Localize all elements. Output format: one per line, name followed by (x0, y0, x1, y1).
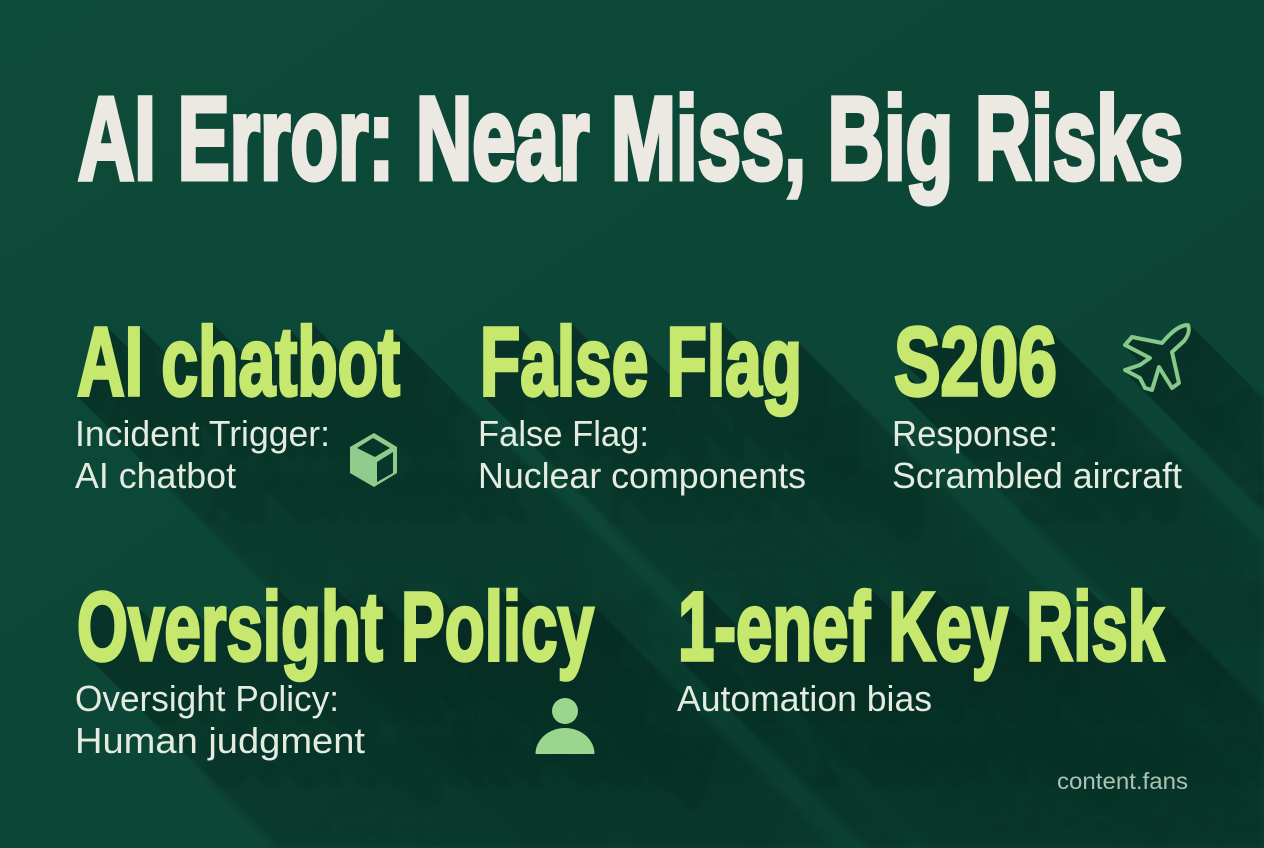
text: oversight policy description: Human judgment (75, 720, 365, 761)
text: incident trigger description: AI chatbot (75, 455, 236, 496)
heading: False Flag: False Flag (480, 307, 802, 416)
icon: person (536, 698, 594, 754)
text: key risk description: Automation bias (677, 678, 932, 719)
heading: S206: S206 (894, 307, 1057, 416)
text: response description: Scrambled aircraft (892, 455, 1182, 496)
panel: incident trigger (75, 307, 400, 496)
icon: cube (350, 433, 397, 487)
heading: Oversight Policy: Oversight Policy (77, 572, 594, 681)
text: oversight policy description: Oversight Policy: (75, 678, 339, 719)
text: incident trigger description: Incident Trigger: (75, 413, 330, 454)
panel: response (892, 307, 1189, 496)
panel: key risk (677, 572, 1165, 719)
text: false flag description: Nuclear components (478, 455, 806, 496)
panel: false flag (478, 307, 806, 496)
heading: AI chatbot: AI chatbot (77, 307, 400, 416)
panel: oversight policy (75, 572, 594, 761)
text: false flag description: False Flag: (478, 413, 649, 454)
icon: aircraft (1125, 325, 1189, 390)
text: response description: Response: (892, 413, 1058, 454)
footer credit: content.fans (1057, 768, 1188, 794)
